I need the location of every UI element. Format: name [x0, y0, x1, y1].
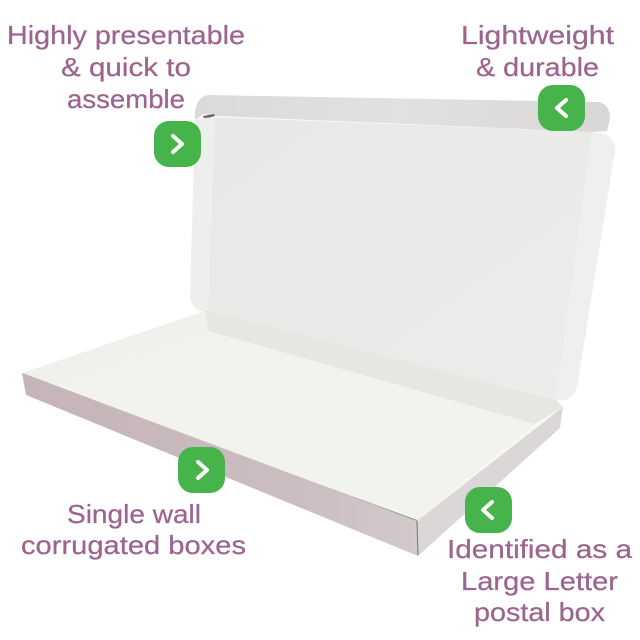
icon: left arrow button top right [538, 85, 585, 131]
label: single wall [21, 499, 246, 560]
label: highly presentable [7, 20, 245, 114]
lid right flap [555, 132, 615, 400]
label: large letter [447, 534, 633, 627]
icon: right arrow button bottom left [178, 447, 225, 493]
lid top flap [195, 95, 610, 132]
label: lightweight: & durable [476, 52, 599, 82]
label: lightweight: Lightweight [461, 20, 615, 50]
label: highly presentable: & quick to [61, 52, 191, 82]
label: single wall: Single wall [67, 499, 201, 529]
corner edge [417, 521, 418, 555]
tray floor [53, 331, 535, 521]
label: large letter: Identified as a [447, 534, 633, 564]
label: highly presentable: Highly presentable [7, 20, 245, 50]
label: lightweight [461, 20, 615, 82]
lid main panel [208, 117, 592, 400]
outer front wall [22, 373, 418, 556]
inner front lip [22, 373, 417, 522]
left wall of tray [22, 311, 208, 387]
label: highly presentable: assemble [67, 84, 185, 114]
icon: left arrow button bottom right [465, 487, 512, 533]
icon: right arrow button top left [154, 121, 201, 167]
label: large letter: postal box [474, 597, 605, 627]
back wall of tray [205, 311, 563, 424]
label: large letter: Large Letter [461, 566, 618, 596]
label: single wall: corrugated boxes [21, 530, 246, 560]
inner right wall [417, 407, 563, 521]
outer right wall [417, 407, 563, 556]
lid left flap [190, 117, 215, 311]
lid slit [203, 114, 215, 119]
open cardboard box [22, 95, 615, 556]
